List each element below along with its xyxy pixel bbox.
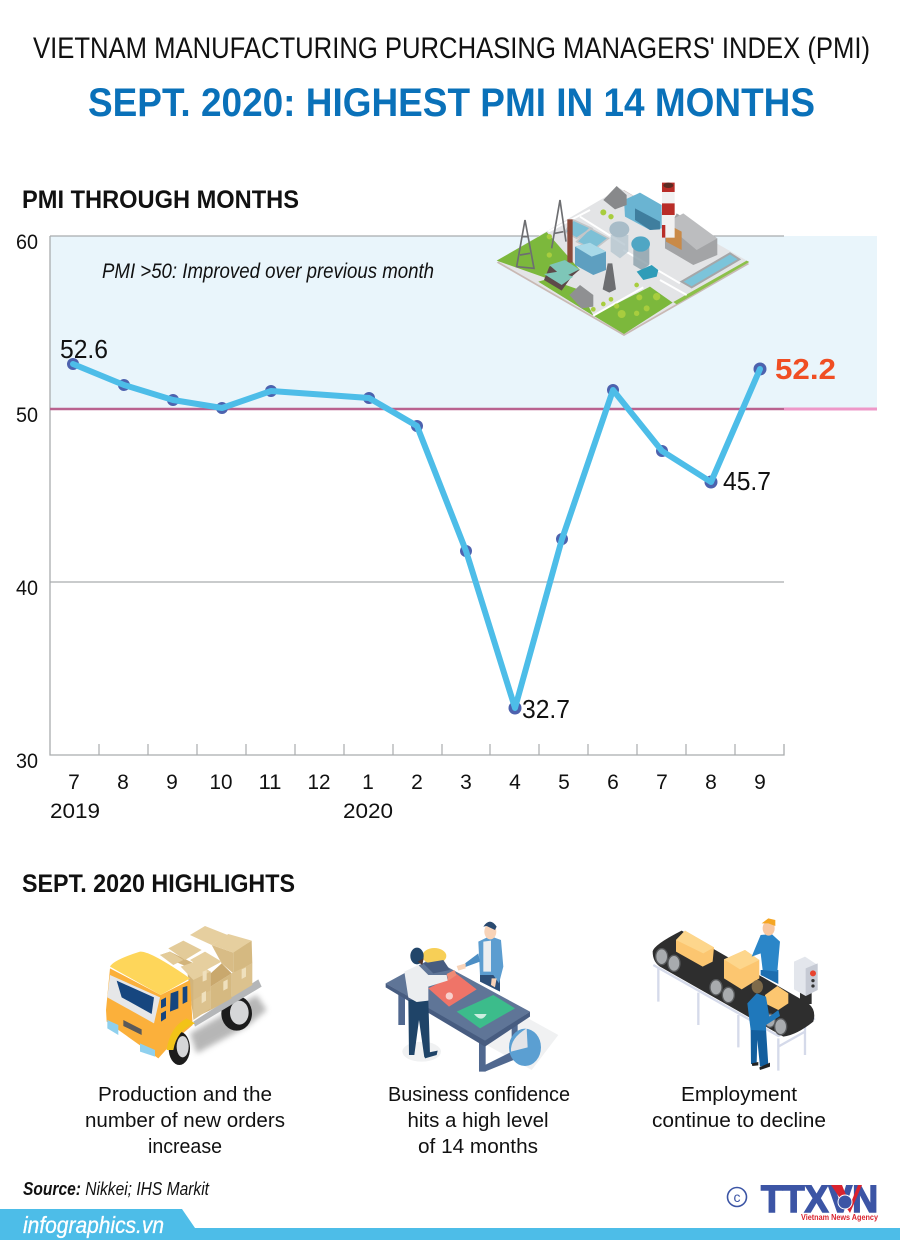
heading: PMI through months: PMI THROUGH MONTHS: [22, 186, 299, 214]
x axis labels: [50, 771, 766, 823]
icon: business meeting: [386, 922, 558, 1072]
boxes: [160, 952, 211, 1018]
front wheel: [169, 1032, 190, 1065]
table legs: [398, 993, 518, 1072]
icon: industrial park: [497, 183, 749, 336]
x axis labels: 2019: [50, 800, 100, 823]
x axis labels: 2020: [343, 800, 393, 823]
front worker: [751, 1028, 768, 1067]
x axis labels: 1: [362, 771, 374, 794]
caption: business confidence: hits a high level: [408, 1110, 548, 1132]
logo: TTXVN: TTXVN: [761, 1179, 878, 1221]
cartons: [676, 931, 714, 967]
caption: business confidence: [388, 1084, 570, 1158]
caption: production: Production and the: [98, 1084, 272, 1106]
heading: highlights: SEPT. 2020 HIGHLIGHTS: [22, 870, 295, 898]
x axis labels: 7: [656, 771, 668, 794]
documents: [428, 974, 477, 1007]
note: PMI above 50: PMI >50: Improved over previous month: [102, 260, 434, 283]
standing man: [480, 970, 500, 992]
flatbed: [193, 979, 262, 1027]
x axis labels: 9: [754, 771, 766, 794]
line chart: [16, 231, 877, 823]
yellow chart disc: [422, 948, 446, 964]
y axis labels: 40: [16, 577, 38, 600]
x axis labels: 6: [607, 771, 619, 794]
footer band: [0, 1209, 900, 1240]
caption: production: [85, 1084, 285, 1158]
pie chart: [509, 1029, 541, 1066]
control box: [800, 992, 812, 1004]
x axis labels: 11: [258, 771, 282, 794]
icon: conveyor workers: [653, 918, 818, 1071]
y axis labels: 50: [16, 404, 38, 427]
x axis labels: 9: [166, 771, 178, 794]
footer band: infographics.vn: [23, 1212, 164, 1238]
caption: employment: continue to decline: [652, 1110, 826, 1132]
y axis labels: 60: [16, 231, 38, 254]
data labels: [60, 334, 836, 724]
data line: [73, 364, 760, 708]
caption: employment: [652, 1084, 826, 1132]
title: [33, 32, 870, 125]
caption: employment: Employment: [681, 1084, 797, 1106]
belt: [653, 931, 814, 1037]
caption: production: increase: [148, 1136, 222, 1158]
frame: [653, 965, 815, 1071]
x axis labels: 10: [210, 771, 232, 794]
x axis labels: 7: [68, 771, 80, 794]
x axis labels: 3: [460, 771, 472, 794]
source: Source: Nikkei; IHS Markit: [23, 1179, 210, 1199]
icon: delivery truck: [106, 926, 267, 1065]
data labels: 45.7: [723, 466, 771, 496]
y axis labels: [16, 231, 38, 773]
y axis labels: 30: [16, 750, 38, 773]
man from back: [408, 1000, 430, 1057]
x axis labels: 2: [411, 771, 423, 794]
data markers: [67, 358, 766, 714]
x axis labels: 8: [117, 771, 129, 794]
data labels: 52.6: [60, 334, 108, 364]
logo: TTXVN: c: [734, 1189, 740, 1205]
caption: production: number of new orders: [85, 1110, 285, 1132]
x axis labels: 12: [308, 771, 330, 794]
x axis labels: 8: [705, 771, 717, 794]
title: SEPT. 2020: HIGHEST PMI IN 14 MONTHS: [88, 81, 815, 125]
x axis labels: 4: [509, 771, 521, 794]
data labels: 32.7: [522, 694, 570, 724]
back worker: [761, 970, 778, 984]
rear wheel: [221, 996, 252, 1031]
data labels: 52.2: [775, 354, 836, 386]
cab: [106, 968, 193, 1058]
table top: [386, 958, 530, 1042]
x axis labels: 5: [558, 771, 570, 794]
caption: business confidence: Business confidence: [388, 1084, 570, 1106]
caption: business confidence: of 14 months: [418, 1136, 538, 1158]
logo: TTXVN: Vietnam News Agency: [801, 1213, 878, 1222]
